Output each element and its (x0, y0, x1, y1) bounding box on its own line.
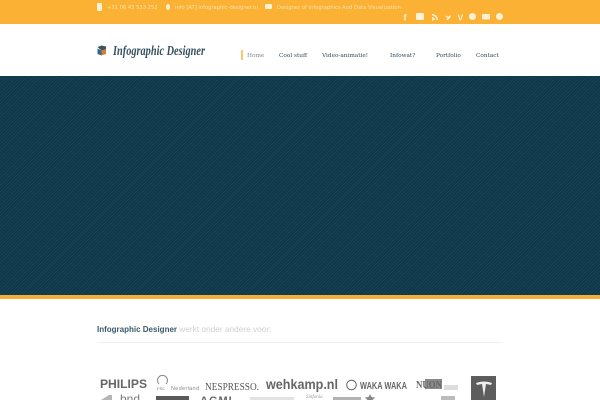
clients heading: Infographic Designer werkt onder andere voor: (97, 324, 271, 334)
logo: script: Sinfonia (306, 395, 323, 400)
top bar (0, 0, 600, 24)
nav: portfolio: Portfolio (436, 52, 461, 58)
hero banner (0, 76, 600, 295)
icon: vimeo: V (458, 12, 464, 22)
icon: facebook: f (404, 12, 408, 22)
logo: FSC Nederland: Nederland (171, 386, 199, 392)
logo: FSC Nederland: FSC (157, 386, 165, 391)
logo: Waka Waka: WAKA WAKA (360, 380, 407, 392)
header (0, 24, 600, 76)
nav: infowat: Infowat? (390, 52, 415, 58)
social icons (404, 12, 503, 22)
icon: linkedin (416, 13, 424, 20)
logo: Tesla (471, 376, 496, 400)
tagline: Designer of Infographics And Data Visualization (277, 5, 401, 11)
logo: Nuon: NUON (416, 380, 443, 391)
logo: data block (250, 397, 294, 400)
logo: star (365, 394, 375, 400)
email address: info [AT] infographic-designer.nl (175, 5, 258, 11)
phone number: +31 06 43 533 252 (107, 5, 158, 11)
icon: envelope (265, 4, 272, 9)
logo: FSC Nederland (157, 375, 199, 392)
active nav marker (241, 50, 243, 60)
icon: rss (432, 14, 438, 20)
logo: small wordmark (333, 397, 361, 400)
nav: contact: Contact (476, 52, 499, 58)
icon: location pin (166, 4, 170, 10)
nav: cool stuff: Cool stuff (279, 52, 307, 58)
logo: small grey block (441, 396, 455, 400)
nav: home: Home (247, 52, 264, 58)
hero bottom border (0, 295, 600, 298)
logo (98, 43, 206, 58)
icon: mail (482, 14, 490, 20)
logo: Nuon (416, 379, 458, 391)
logo: dark block (156, 396, 189, 400)
logo: second row number one (101, 395, 112, 400)
icon: phone (97, 3, 102, 11)
logo: Philips: PHILIPS (100, 379, 147, 391)
divider (97, 342, 503, 343)
icon: circle badge (469, 13, 476, 20)
nav: video: Video-animatie! (322, 52, 368, 58)
logo: Nespresso: NESPRESSO. (205, 382, 259, 393)
icon: pinterest (496, 13, 503, 20)
logo: Waka Waka (347, 380, 407, 392)
logo: wehkamp: wehkamp.nl (265, 377, 338, 392)
icon: twitter (445, 15, 451, 20)
icon: logo cube (98, 46, 106, 56)
client logos (100, 374, 496, 400)
